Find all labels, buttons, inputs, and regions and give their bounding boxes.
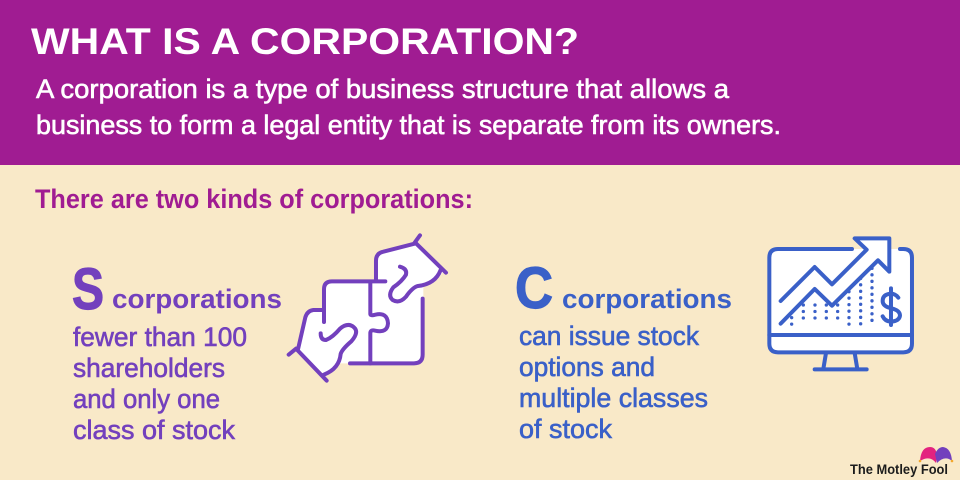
panel: C corporations <box>515 256 732 444</box>
logo wordmark: The Motley Fool <box>850 462 948 477</box>
C corporations description: can issue stock <box>519 321 700 351</box>
heading: C corporations <box>515 256 732 321</box>
C corporations description: of stock <box>519 414 613 444</box>
dotted chart area <box>792 268 872 324</box>
definition text: A corporation is a type of business structure that allows a <box>36 74 730 104</box>
definition text <box>36 74 781 140</box>
logo: The Motley Fool <box>850 447 953 477</box>
heading: S corporations: corporations <box>112 284 282 314</box>
icon: monitor with rising chart <box>769 238 912 369</box>
title: WHAT IS A CORPORATION? <box>31 21 579 62</box>
icon: jester hat <box>919 447 953 463</box>
heading: S corporations: S <box>72 257 104 322</box>
definition text: business to form a legal entity that is separate from its owners. <box>36 110 781 140</box>
C corporations description: multiple classes <box>519 383 708 413</box>
S corporations description: and only one <box>73 384 220 414</box>
subheading: There are two kinds of corporations: <box>35 184 473 214</box>
S corporations description: class of stock <box>73 415 236 445</box>
S corporations description <box>73 322 247 445</box>
icon: puzzle pieces held by hands <box>289 235 446 381</box>
heading: C corporations: C <box>515 256 553 321</box>
C corporations description: options and <box>519 352 655 382</box>
heading: C corporations: corporations <box>562 284 732 314</box>
panel: purple header <box>0 0 960 165</box>
S corporations description: fewer than 100 <box>73 322 247 352</box>
dollar sign <box>883 288 900 325</box>
C corporations description <box>519 321 708 444</box>
panel: S corporations <box>72 257 282 445</box>
S corporations description: shareholders <box>73 353 225 383</box>
heading: S corporations <box>72 257 282 322</box>
